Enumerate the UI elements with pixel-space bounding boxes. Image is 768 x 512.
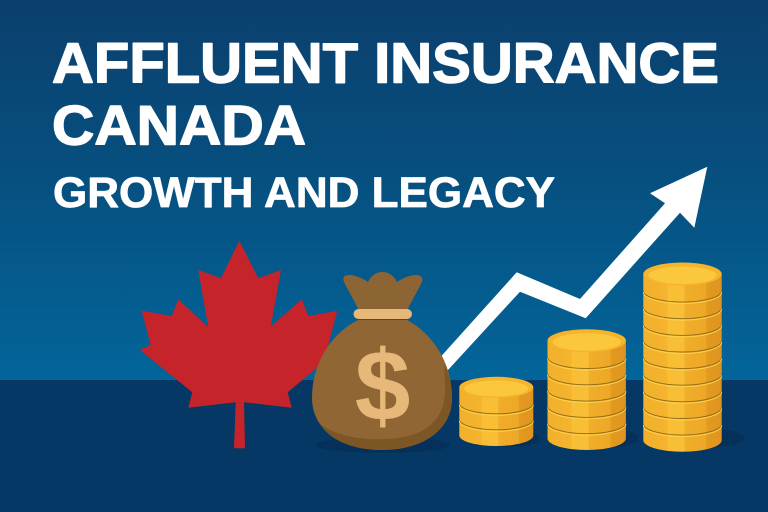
title	[52, 32, 719, 156]
title: CANADA	[52, 94, 306, 156]
bag top ruffle	[343, 272, 422, 312]
dollar sign: $	[355, 330, 410, 442]
growth arrow	[436, 167, 707, 370]
coin stack large	[643, 262, 744, 452]
subtitle: GROWTH AND LEGACY	[53, 169, 555, 217]
coin stack medium	[548, 329, 638, 450]
title: AFFLUENT INSURANCE	[52, 32, 719, 96]
coin stack small	[459, 377, 540, 447]
money bag	[312, 272, 452, 453]
background sky	[0, 0, 768, 381]
bag body	[312, 320, 452, 450]
bag body shade	[320, 364, 452, 450]
bag tie	[354, 309, 412, 319]
background floor	[0, 380, 768, 512]
maple leaf	[140, 241, 338, 448]
